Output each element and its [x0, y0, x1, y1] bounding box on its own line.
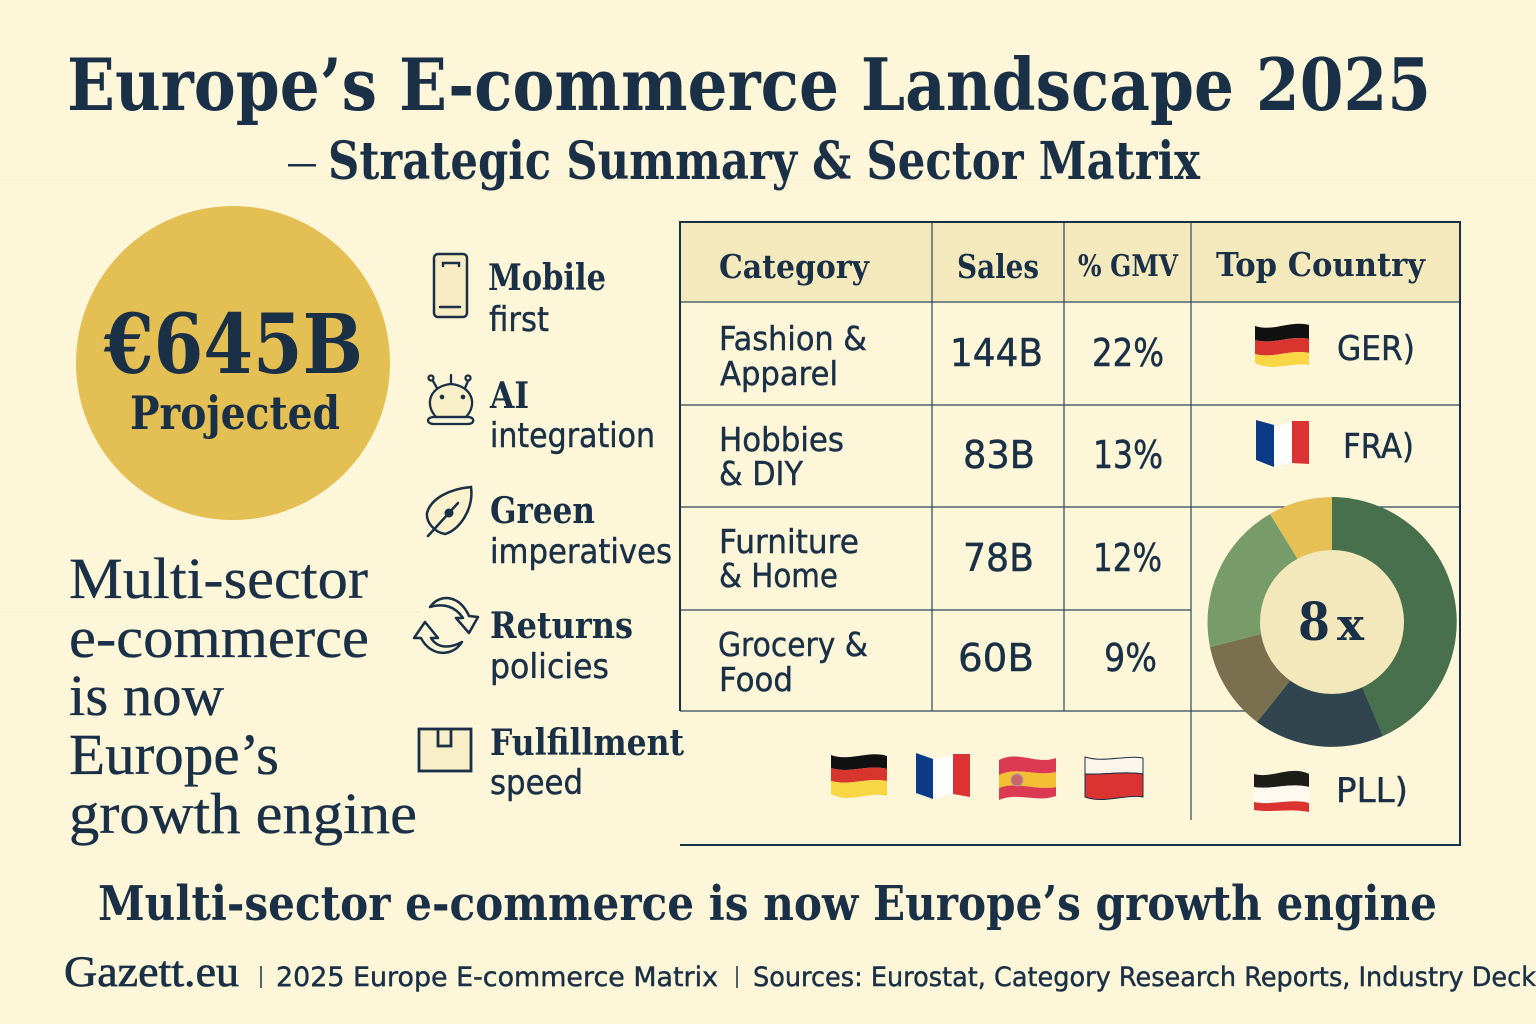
- panel: projected value badge: [76, 206, 390, 520]
- text: fulfillment speed: [490, 722, 684, 803]
- row: furniture and home: 12%: [1093, 536, 1162, 580]
- row: furniture and home: 78B: [963, 536, 1034, 580]
- top country: France: FRA): [1343, 427, 1414, 467]
- text: AI integration: integration: [490, 416, 655, 456]
- text block: growth statement: [69, 546, 417, 846]
- row: furniture and home: [719, 522, 1162, 595]
- text: returns policies: Returns: [490, 605, 633, 647]
- text: mobile first: Mobile: [488, 257, 606, 299]
- row: fashion and apparel: 144B: [950, 331, 1043, 375]
- text block: growth statement: Europe’s: [69, 722, 279, 787]
- icon: mobile phone: [434, 254, 467, 317]
- table header: Category: [719, 247, 870, 286]
- top country: Germany: GER): [1337, 329, 1415, 369]
- top country: Poland: [1254, 771, 1408, 812]
- text: green imperatives: imperatives: [490, 532, 672, 572]
- top country: Germany: [1255, 324, 1415, 369]
- panel: projected value badge: €645B: [103, 297, 363, 393]
- chart: donut: 8: [1298, 592, 1330, 653]
- row: hobbies and DIY: & DIY: [719, 454, 804, 493]
- row: furniture and home: & Home: [719, 556, 838, 595]
- panel: strategic priorities list: [414, 254, 684, 803]
- top country: Poland: PLL): [1336, 771, 1408, 811]
- text: mobile first: [488, 257, 606, 340]
- row: furniture and home: Furniture: [719, 522, 859, 561]
- table header: % GMV: [1078, 249, 1179, 284]
- chart: donut: x: [1337, 600, 1365, 651]
- text: returns policies: policies: [490, 647, 609, 687]
- row: grocery and food: 9%: [1104, 636, 1157, 680]
- table header: Sales: [957, 247, 1039, 286]
- row: grocery and food: Food: [719, 660, 793, 699]
- footer: 2025 Europe E-commerce Matrix: [276, 962, 718, 993]
- flags row: [831, 753, 1143, 800]
- text block: growth statement: growth engine: [69, 781, 417, 846]
- title: [67, 42, 1431, 192]
- text block: growth statement: Multi-sector: [69, 546, 368, 611]
- top country: France: [1256, 420, 1414, 467]
- footer: Gazett.eu: [64, 949, 239, 996]
- panel: sector matrix table: [680, 222, 1460, 845]
- text: AI integration: [489, 375, 655, 456]
- row: hobbies and DIY: 13%: [1093, 433, 1163, 477]
- text block: growth statement: e-commerce: [69, 605, 369, 670]
- row: grocery and food: [718, 625, 1157, 699]
- icon: fulfillment box: [419, 729, 471, 771]
- row: grocery and food: 60B: [958, 636, 1034, 680]
- icon: green leaf: [427, 487, 471, 536]
- row: hobbies and DIY: 83B: [963, 433, 1035, 477]
- icon: returns arrows: [414, 598, 478, 653]
- text: green imperatives: [490, 490, 672, 572]
- row: hobbies and DIY: Hobbies: [719, 420, 844, 459]
- panel: projected value badge: Projected: [130, 386, 340, 440]
- row: fashion and apparel: [719, 319, 1164, 393]
- text: green imperatives: Green: [490, 490, 595, 532]
- text: returns policies: [490, 605, 633, 687]
- row: fashion and apparel: Apparel: [720, 354, 838, 393]
- row: fashion and apparel: Fashion &: [719, 319, 867, 358]
- row: grocery and food: Grocery &: [718, 625, 868, 664]
- text: fulfillment speed: speed: [490, 763, 583, 803]
- text: AI integration: AI: [489, 375, 529, 417]
- text: mobile first: first: [489, 300, 549, 340]
- chart: donut: [1208, 497, 1457, 747]
- text block: growth statement: is now: [69, 663, 224, 728]
- table header: Top Country: [1216, 245, 1426, 284]
- row: fashion and apparel: 22%: [1092, 331, 1164, 375]
- title: Strategic Summary & Sector Matrix: [328, 131, 1201, 192]
- text: fulfillment speed: Fulfillment: [490, 722, 684, 764]
- icon: AI robot: [428, 375, 473, 424]
- footer: [64, 949, 1536, 996]
- table header: [681, 223, 1459, 302]
- row: hobbies and DIY: [719, 420, 1163, 493]
